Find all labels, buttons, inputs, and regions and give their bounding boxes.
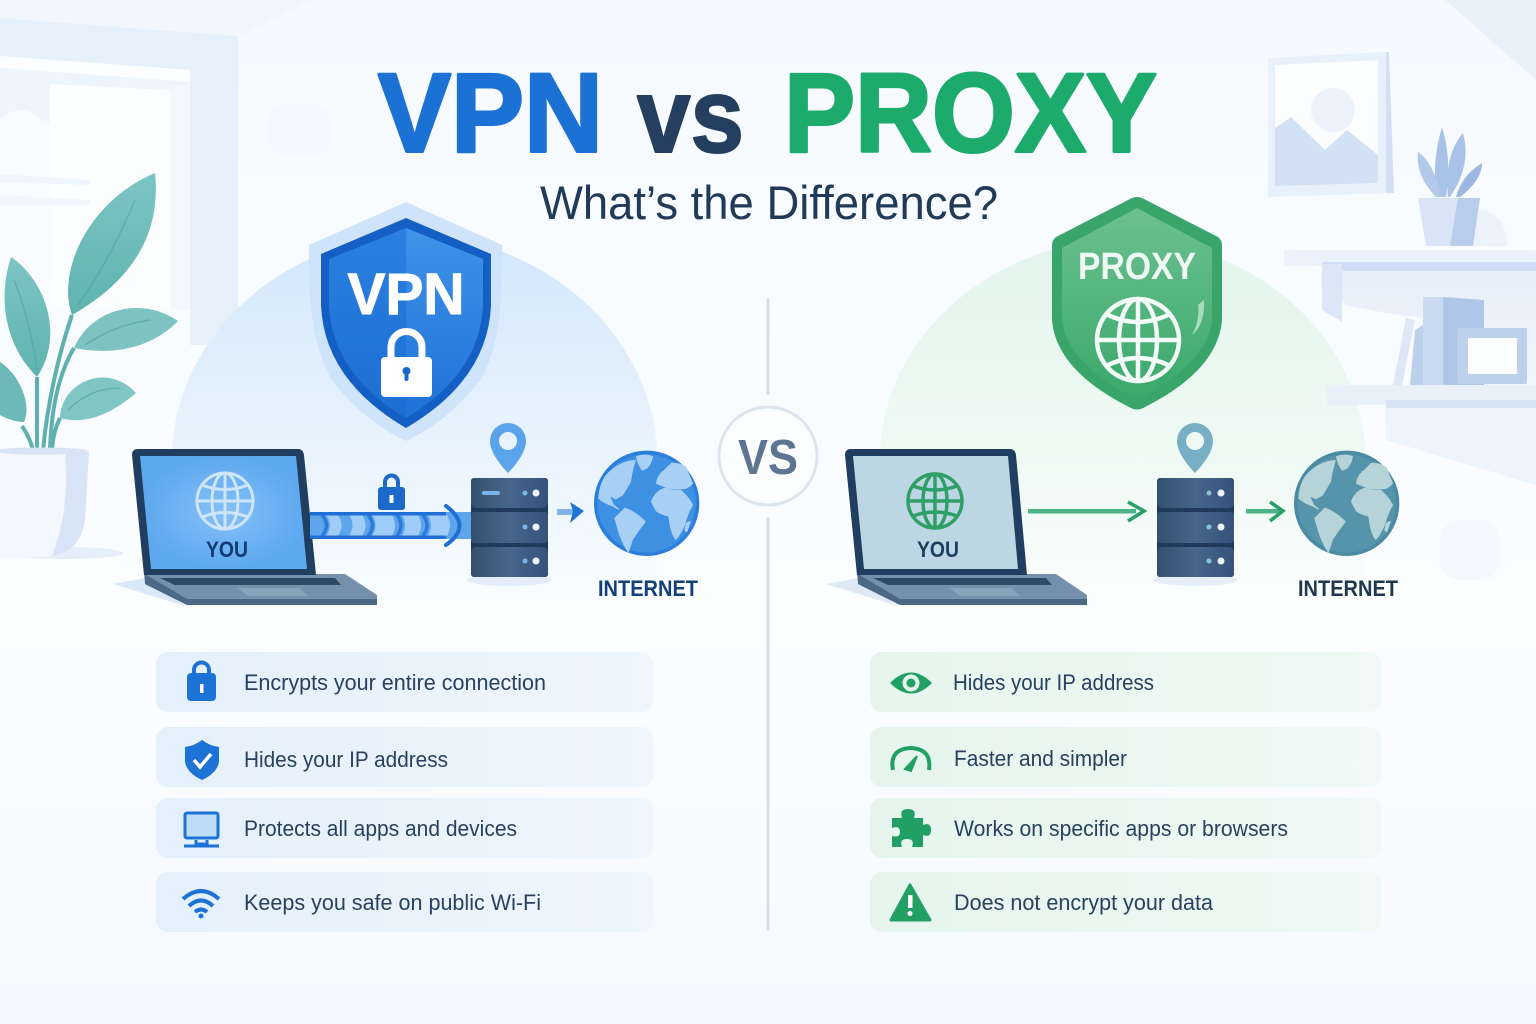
PROXY server	[1153, 478, 1237, 586]
panel: VPN features	[156, 652, 653, 932]
PROXY location pin	[1177, 423, 1213, 473]
title	[378, 50, 1157, 176]
decorative room: potted plant	[1418, 127, 1507, 246]
VPN shield badge: VPN	[348, 262, 464, 327]
decorative room: framed picture	[1268, 52, 1394, 197]
row: works on specific apps: Works on specific apps or browsers	[954, 816, 1288, 841]
row: hides IP	[156, 727, 653, 787]
decorative plant	[0, 173, 178, 559]
green backdrop arc	[880, 240, 1365, 600]
VPN arrow to internet	[557, 502, 584, 523]
decorative room: shelves with books	[1284, 250, 1536, 580]
panel: Proxy features	[870, 652, 1381, 932]
row: faster	[870, 727, 1381, 787]
VPN location pin	[490, 423, 526, 473]
row: wifi	[156, 872, 653, 932]
icon: globe	[1097, 299, 1179, 381]
blue backdrop arc	[172, 236, 657, 600]
label: internet: INTERNET	[598, 576, 699, 601]
VPN shield badge	[309, 202, 502, 441]
PROXY shield badge: PROXY	[1078, 246, 1196, 288]
icon: screen globe	[908, 474, 962, 528]
VPN globe	[594, 451, 699, 556]
VS badge: VS	[738, 431, 798, 485]
VPN server	[467, 478, 551, 586]
label: you: YOU	[917, 537, 959, 562]
row: does not encrypt: Does not encrypt your data	[954, 890, 1214, 915]
decorative room: window	[0, 0, 330, 345]
PROXY shield badge	[1052, 197, 1222, 410]
subtitle: What’s the Difference?	[540, 176, 998, 229]
row: does not encrypt	[870, 872, 1381, 932]
row: works on specific apps	[870, 798, 1381, 858]
row: hides IP: Hides your IP address	[244, 747, 448, 772]
center divider	[766, 298, 770, 930]
icon: padlock	[381, 332, 432, 397]
VPN laptop	[113, 449, 377, 606]
label: you: YOU	[206, 537, 248, 562]
row: faster: Faster and simpler	[954, 746, 1127, 771]
row: wifi: Keeps you safe on public Wi-Fi	[244, 890, 541, 915]
PROXY arrow to server	[1028, 502, 1144, 521]
row: encrypts	[156, 652, 653, 712]
PROXY globe	[1294, 451, 1399, 556]
title: PROXY	[784, 50, 1157, 176]
row: protects	[156, 798, 653, 858]
PROXY laptop	[826, 449, 1087, 606]
label: internet: INTERNET	[1298, 576, 1399, 601]
row: hides IP	[870, 652, 1381, 712]
icon: screen globe	[197, 473, 253, 529]
encrypted tunnel	[310, 476, 472, 545]
title: vs	[637, 57, 744, 175]
row: hides IP: Hides your IP address	[953, 670, 1154, 695]
title: VPN	[378, 50, 603, 176]
row: protects: Protects all apps and devices	[244, 816, 517, 841]
decorative room: top right corner	[1445, 0, 1536, 80]
icon: small padlock	[378, 476, 405, 510]
PROXY arrow to internet	[1246, 502, 1283, 521]
row: encrypts: Encrypts your entire connection	[244, 670, 546, 695]
VS badge	[719, 407, 817, 505]
